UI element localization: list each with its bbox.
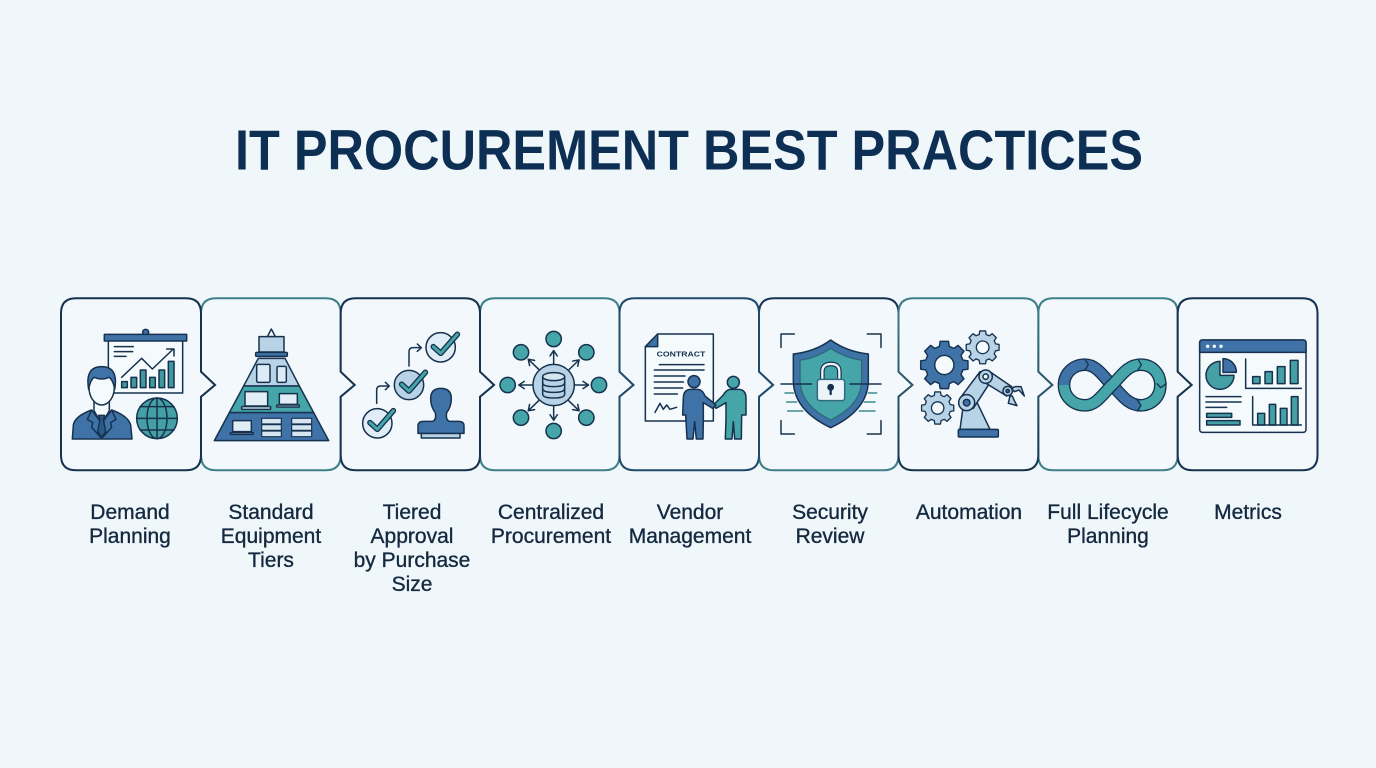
card: Metrics — [1178, 298, 1318, 470]
icon: tiered approval checks and stamp — [363, 333, 464, 438]
card: Tiered Approval — [341, 298, 494, 470]
icon: presenter with chart and globe — [72, 329, 187, 439]
label: Vendor Management: Management — [629, 525, 751, 548]
label: Tiered Approval by Purchase Size: by Purchase — [354, 549, 470, 572]
icon: gears and robotic arm — [921, 331, 1024, 437]
card: Vendor Management — [620, 298, 773, 470]
label: Standard Equipment Tiers: Tiers — [248, 549, 294, 572]
card: Automation — [899, 298, 1052, 470]
label: Security Review: Security — [792, 501, 868, 524]
label: Centralized Procurement: Centralized — [498, 501, 604, 524]
icon: contract and handshake — [645, 334, 746, 439]
label: Centralized Procurement: Procurement — [491, 525, 611, 548]
label: Tiered Approval by Purchase Size: Size — [392, 573, 432, 596]
card: Centralized Procurement — [480, 298, 634, 470]
icon: security shield with padlock — [781, 334, 881, 434]
label: Metrics: Metrics — [1214, 501, 1282, 524]
card: Security Review — [759, 298, 912, 470]
card: Standard Equipment Tiers — [201, 298, 355, 470]
label: Tiered Approval by Purchase Size: Tiered — [383, 501, 441, 524]
card: Demand Planning — [61, 298, 215, 470]
label: Demand Planning: Demand — [90, 501, 170, 524]
label: Full Lifecycle Planning: Planning — [1067, 525, 1149, 548]
label: Security Review: Review — [796, 525, 865, 548]
icon: infinity lifecycle loop — [1064, 359, 1167, 411]
label: Standard Equipment Tiers: Standard — [228, 501, 314, 524]
card: Full Lifecycle Planning — [1038, 298, 1192, 470]
icon: metrics dashboard window — [1200, 340, 1306, 432]
title: IT PROCUREMENT BEST PRACTICES — [235, 118, 1143, 182]
label: Standard Equipment Tiers: Equipment — [221, 525, 321, 548]
icon: equipment tier pyramid — [214, 329, 329, 441]
label: Vendor Management: Vendor — [657, 501, 723, 524]
icon: contract and handshake: CONTRACT — [657, 349, 706, 358]
icon: central database hub with nodes — [500, 331, 607, 439]
label: Automation: Automation — [916, 501, 1022, 524]
label: Demand Planning: Planning — [89, 525, 171, 548]
label: Tiered Approval by Purchase Size: Approval — [371, 525, 453, 548]
label: Full Lifecycle Planning: Full Lifecycle — [1047, 501, 1169, 524]
